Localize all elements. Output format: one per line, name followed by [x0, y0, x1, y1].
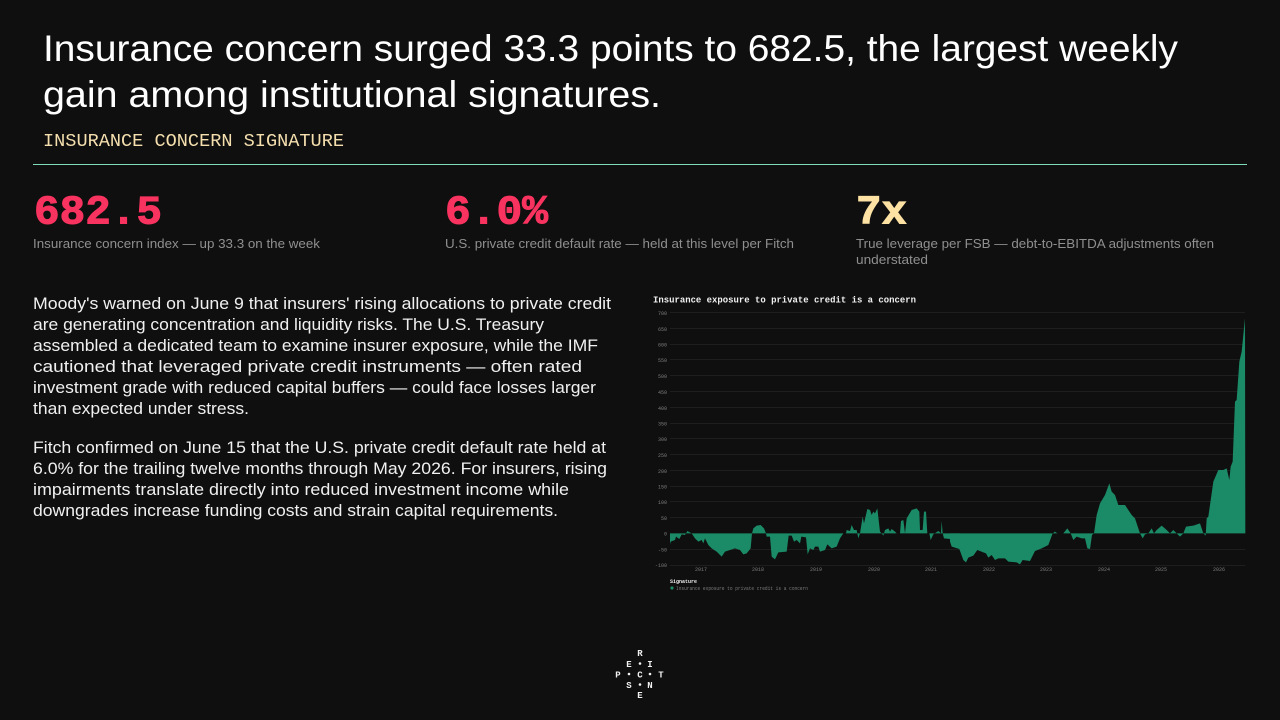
body text: first paragraph [33, 295, 612, 418]
logo: I [647, 660, 653, 670]
stat: default rate: U.S. private credit default rate — held at this level per Fitch [445, 237, 794, 251]
x axis labels: 2024 [1098, 567, 1110, 573]
logo: R [637, 649, 643, 659]
y axis labels: 250 [658, 453, 667, 459]
stat: true leverage [856, 190, 1214, 267]
x axis labels [695, 567, 1225, 573]
logo: N [647, 681, 653, 691]
x axis labels: 2017 [695, 567, 707, 573]
title: Insurance concern surged 33.3 points to 682.5, the largest weekly [43, 28, 1179, 69]
y axis labels: 150 [658, 484, 667, 490]
x axis labels: 2023 [1040, 567, 1052, 573]
area series [670, 318, 1245, 564]
body text: second paragraph: impairments translate directly into reduced investment income while [33, 481, 569, 499]
y axis labels: 650 [658, 327, 667, 333]
y axis labels: 300 [658, 437, 667, 443]
y axis labels: 0 [664, 532, 667, 538]
y axis labels: 700 [658, 311, 667, 317]
y axis labels: 100 [658, 500, 667, 506]
stat: default rate: 6.0% [445, 190, 548, 236]
body text: second paragraph: downgrades increase funding costs and strain capital requirements. [33, 502, 558, 520]
y axis labels: 50 [661, 516, 667, 522]
logo: S [626, 681, 632, 691]
x axis labels: 2019 [810, 567, 822, 573]
y axis labels: 550 [658, 358, 667, 364]
title: gain among institutional signatures. [43, 74, 661, 115]
body text: first paragraph: assembled a dedicated team to examine insurer exposure, while the IMF [33, 337, 598, 355]
body text: first paragraph: cautioned that leveraged private credit instruments — often rated [33, 358, 582, 376]
y axis labels: 600 [658, 342, 667, 348]
stat: true leverage: understated [856, 253, 928, 267]
logo: E [637, 691, 643, 701]
y axis labels: 350 [658, 422, 667, 428]
x axis labels: 2021 [925, 567, 937, 573]
y axis labels: 400 [658, 406, 667, 412]
logo: C [637, 670, 643, 680]
chart title: Insurance exposure to private credit is a concern [653, 296, 916, 306]
legend: Insurance exposure to private credit is a concern [676, 586, 808, 592]
y axis labels: -100 [655, 563, 667, 569]
stat: true leverage: 7x [856, 190, 907, 236]
stat: true leverage: True leverage per FSB — debt-to-EBITDA adjustments often [856, 237, 1214, 251]
body text: first paragraph: than expected under stress. [33, 400, 249, 418]
stat: default rate [445, 190, 794, 251]
chart: insurance exposure [653, 296, 1245, 592]
stat: insurance concern index: Insurance concern index — up 33.3 on the week [33, 237, 321, 251]
logo [615, 649, 664, 701]
x axis labels: 2026 [1213, 567, 1225, 573]
stat: insurance concern index: 682.5 [34, 190, 162, 236]
title [43, 28, 1179, 115]
x axis labels: 2025 [1155, 567, 1167, 573]
logo: E [626, 660, 632, 670]
y axis labels [655, 311, 667, 569]
body text: first paragraph: investment grade with reduced capital buffers — could face losses larger [33, 379, 597, 397]
y axis labels: 200 [658, 469, 667, 475]
body text: second paragraph [33, 439, 607, 520]
y axis labels: 450 [658, 390, 667, 396]
subtitle: INSURANCE CONCERN SIGNATURE [43, 131, 344, 152]
x axis labels: 2018 [752, 567, 764, 573]
stat: insurance concern index [33, 190, 321, 251]
x axis labels: 2020 [868, 567, 880, 573]
logo: T [658, 670, 664, 680]
logo: P [615, 670, 621, 680]
y axis labels: -50 [658, 548, 667, 554]
legend: Signature [670, 579, 697, 585]
x axis labels: 2022 [983, 567, 995, 573]
y axis labels: 500 [658, 374, 667, 380]
body text: second paragraph: 6.0% for the trailing twelve months through May 2026. For insurers, rising [33, 460, 607, 478]
legend [670, 579, 808, 592]
body text: first paragraph: Moody's warned on June 9 that insurers' rising allocations to private credit [33, 295, 612, 313]
body text: second paragraph: Fitch confirmed on June 15 that the U.S. private credit default rate held at [33, 439, 607, 457]
body text: first paragraph: are generating concentration and liquidity risks. The U.S. Treasury [33, 316, 545, 334]
